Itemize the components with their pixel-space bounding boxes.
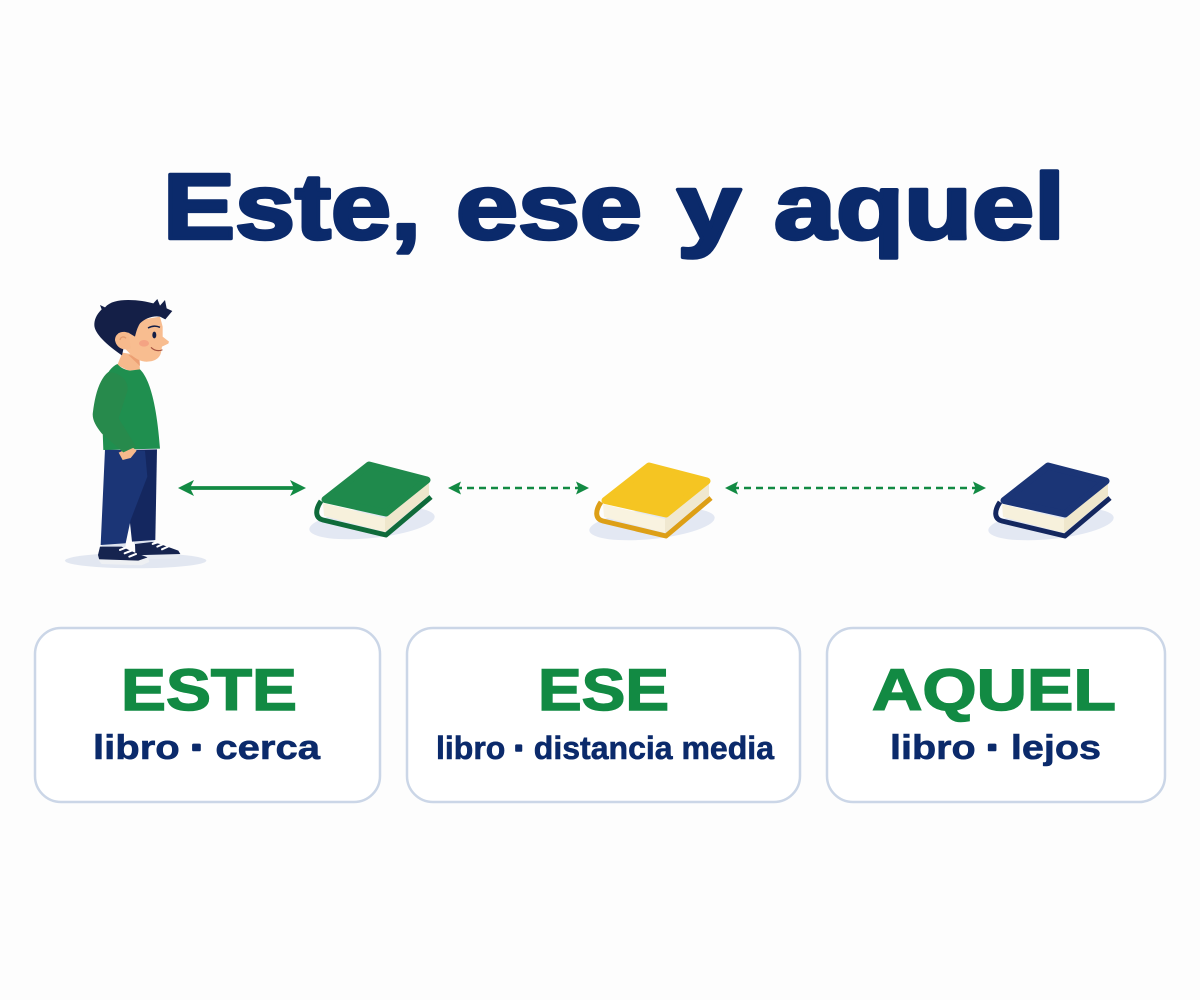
- label: libro distancia media: libro · distancia media: [436, 730, 774, 766]
- cheek: [139, 340, 149, 347]
- panel: este: [35, 628, 380, 802]
- panel: aquel: [827, 628, 1165, 802]
- arrow: dashed medium: [455, 487, 582, 489]
- title: Este,: [163, 154, 421, 258]
- ground shadow: [65, 553, 206, 568]
- legs: navy trousers: [101, 449, 157, 545]
- ear: [115, 332, 131, 349]
- book: green: [308, 465, 436, 545]
- hand in pocket: [119, 447, 137, 460]
- book: navy: [987, 466, 1115, 546]
- person figure: [65, 299, 206, 568]
- hair: [94, 299, 172, 355]
- title: aquel: [774, 154, 1065, 258]
- arrow: solid near: [186, 486, 298, 490]
- socks: [102, 538, 155, 549]
- neck: [117, 353, 140, 371]
- label: libro lejos: libro · lejos: [890, 729, 1101, 767]
- head: [125, 317, 169, 362]
- panel: ese: [407, 628, 800, 802]
- arm: [93, 372, 136, 452]
- shoes: [98, 542, 181, 565]
- eye and brow: [148, 326, 160, 338]
- arrow: dashed far: [732, 487, 979, 489]
- green sweater: [102, 364, 160, 450]
- title: ese: [456, 154, 642, 258]
- heading: aquel: AQUEL: [872, 658, 1116, 723]
- heading: ese: ESE: [538, 658, 669, 723]
- label: libro cerca: libro · cerca: [93, 729, 321, 767]
- book: yellow: [588, 466, 716, 546]
- smile: [151, 348, 162, 351]
- heading: este: ESTE: [121, 658, 297, 723]
- title: [163, 154, 1065, 258]
- title: y: [677, 154, 741, 258]
